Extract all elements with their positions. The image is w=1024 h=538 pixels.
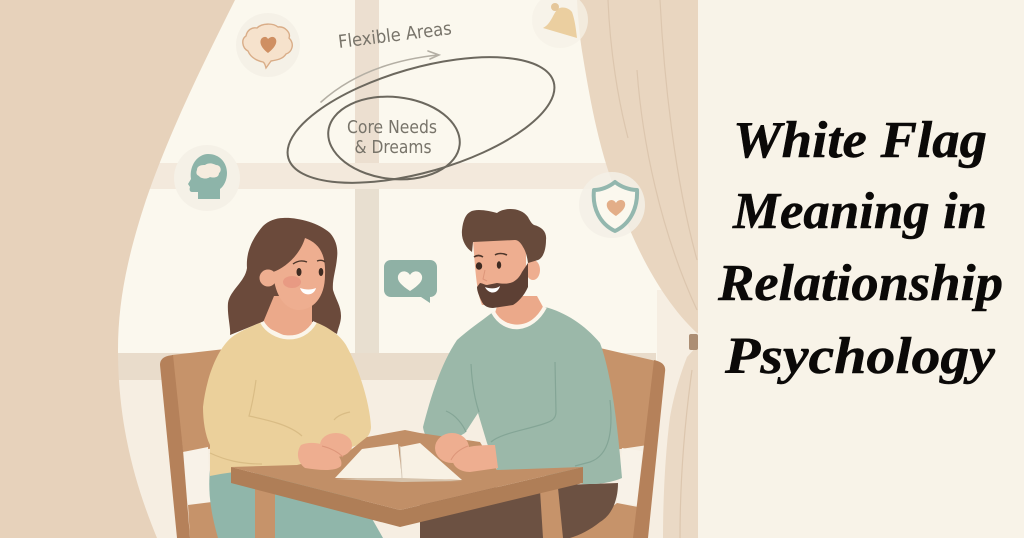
table edge [231,467,583,527]
lower wall [100,380,698,538]
diagram: outer ellipse [274,32,568,208]
woman [203,218,383,538]
left curtain [0,0,235,538]
label: core needs and dreams: Core Needs [347,117,437,138]
woman eyes and brows [293,260,325,276]
title: Meaning in [732,183,987,240]
table [231,430,583,538]
label: core needs and dreams [347,117,437,158]
woman cheek [283,276,301,288]
right chair [570,348,665,538]
panel: right title background [698,0,1024,538]
man eyes and brows [474,254,507,270]
woman face [273,238,325,310]
diagram: inner ellipse [324,90,464,186]
icon: heart speech bubble [384,260,437,303]
man trousers [420,483,618,538]
diagram: flexible areas arrow [321,51,439,102]
man sweater [423,307,622,484]
woman ear [260,270,276,286]
label: flexible areas: Flexible Areas [337,18,453,53]
table top [231,430,583,510]
man neck [495,296,543,325]
man face [473,240,526,305]
woman trousers [209,470,383,538]
title: Psychology [724,328,996,385]
man sweater folds [446,362,611,466]
icon: bell [532,0,588,48]
man smile [485,286,500,293]
woman sweater [203,322,371,476]
window side wall [657,290,698,538]
left chair [160,349,252,538]
woman collar [262,322,315,337]
man hair [462,209,546,263]
man hands [435,433,498,472]
window frame [110,0,656,380]
title [717,112,1003,385]
man collar [493,307,545,327]
table legs [255,480,563,538]
woman smile [300,288,316,294]
icon: shield with heart [579,172,645,238]
woman hair [228,218,341,335]
man [420,209,622,538]
woman sweater folds [210,380,350,464]
title: Relationship [717,255,1003,312]
man ear [526,260,540,280]
panel: room wall [100,0,698,538]
icon: brain with heart [236,13,300,77]
man nose [483,270,487,281]
man beard [477,263,528,308]
open book [335,443,463,482]
woman neck [262,296,315,342]
label: core needs and dreams: & Dreams [354,137,432,158]
title: White Flag [733,112,987,169]
right curtain [577,0,698,538]
icon: teal head with thought [174,145,240,211]
woman hands [298,433,352,470]
